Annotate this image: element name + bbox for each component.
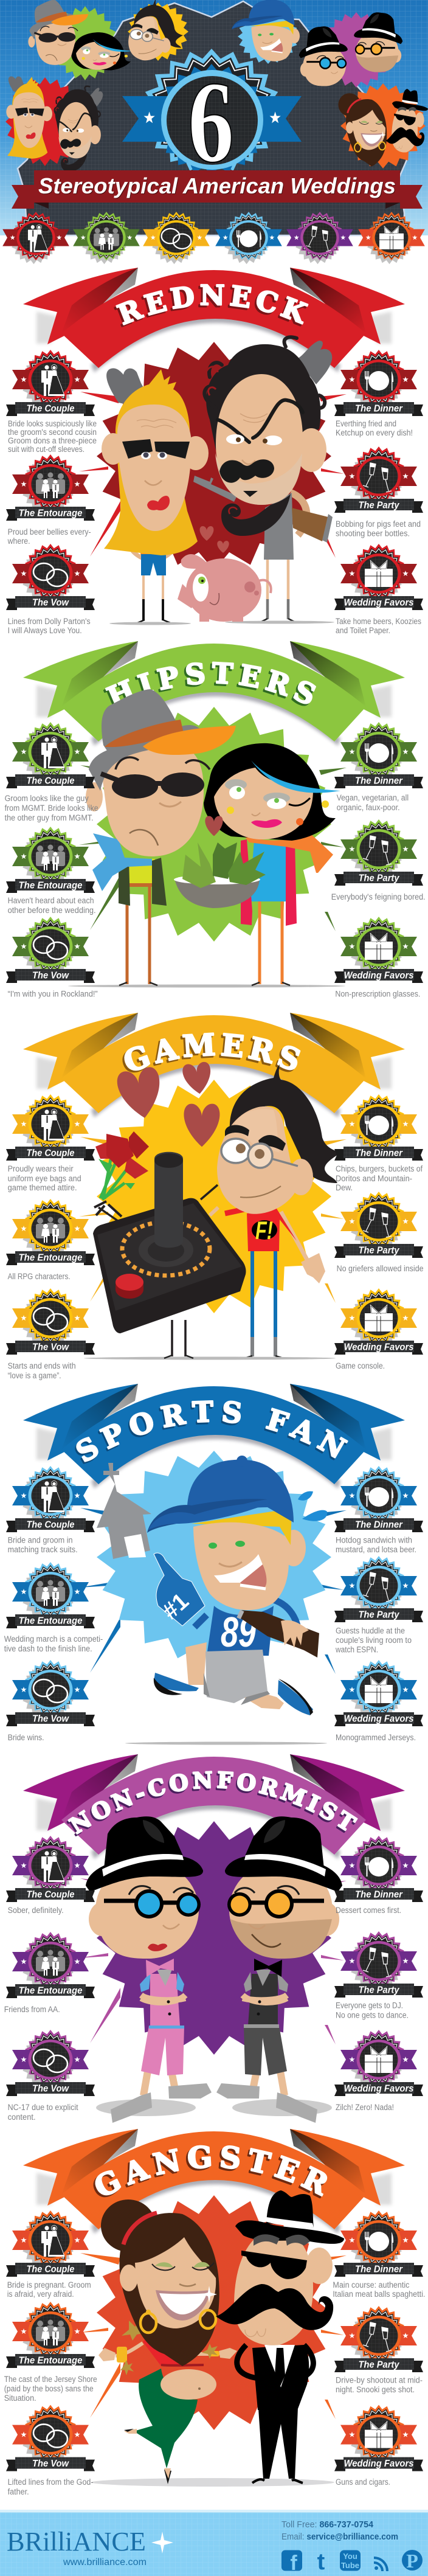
icon: sweat drops — [298, 1491, 327, 1521]
logo wordmark: BRilliANCE — [7, 2527, 146, 2557]
icon: pinterest: P — [406, 2550, 418, 2572]
badge: wedding favors: Wedding Favors — [344, 2459, 414, 2469]
text: the party: watch ESPN. — [335, 1645, 378, 1654]
toll free: Toll Free: 866-737-0754 — [281, 2520, 373, 2530]
logo sparkle — [151, 2532, 173, 2553]
badge: the couple: The Couple — [27, 1519, 75, 1530]
badge: the party: The Party — [359, 2360, 400, 2370]
text: the couple: matching track suits. — [8, 1545, 78, 1554]
text: the couple: Groom dons a three-piece — [8, 436, 97, 445]
website: www.brilliance.com — [63, 2557, 147, 2567]
text: the vow — [8, 617, 91, 635]
text: the couple: the groom's second cousin — [8, 428, 97, 437]
ribbon: sports fan — [23, 1384, 405, 1489]
text: wedding favors: and Toilet Paper. — [336, 626, 390, 635]
badge: the party — [334, 2306, 423, 2372]
text: the couple: Bride is pregnant. Groom — [7, 2280, 91, 2290]
text: wedding favors: Monogrammed Jerseys. — [336, 1733, 416, 1742]
text: the couple: from MGMT. Bride looks like — [5, 804, 98, 813]
text: the dinner: Vegan, vegetarian, all — [337, 793, 409, 802]
text: the entourage — [4, 1634, 103, 1653]
text: the entourage: All RPG characters. — [8, 1272, 71, 1281]
character: hipster groom — [68, 689, 345, 988]
text: the dinner: Ketchup on every dish! — [336, 428, 413, 437]
badge: the dinner: The Dinner — [355, 2264, 403, 2275]
ribbon: hipsters — [23, 641, 405, 747]
badge: the entourage — [6, 1932, 95, 1998]
badge: the couple: The Couple — [27, 1889, 75, 1900]
text: the entourage: Friends from AA. — [4, 2005, 60, 2014]
text: the dinner: Dessert comes first. — [336, 1906, 401, 1915]
badge: the dinner: The Dinner — [355, 404, 403, 414]
badge: the couple: The Couple — [27, 1148, 75, 1158]
text: the entourage — [4, 2375, 97, 2403]
character: redneck groom — [193, 337, 334, 624]
illustration: bowl of greens — [174, 842, 266, 908]
text: the entourage — [7, 527, 91, 546]
text: the couple: the other guy from MGMT. — [5, 813, 94, 822]
panel: non-conformist — [4, 1754, 423, 2123]
text: the vow: father. — [8, 2487, 29, 2496]
text: the vow: I will Always Love You. — [8, 626, 82, 635]
ribbon: redneck — [23, 268, 405, 373]
badge: the entourage: The Entourage — [18, 881, 83, 890]
icon: heart — [205, 816, 223, 836]
text: the dinner — [336, 419, 413, 437]
badge: the vow — [6, 544, 95, 610]
text: the dinner: organic, faux-poor. — [337, 803, 400, 812]
badge: the dinner — [334, 1836, 423, 1902]
badge: the entourage — [6, 827, 95, 893]
character: sports fan: 89 — [221, 1608, 256, 1656]
text: the party — [336, 2376, 423, 2394]
badge: the vow: The Vow — [32, 971, 69, 981]
text: the dinner — [336, 1536, 416, 1554]
badge: the dinner — [334, 350, 423, 416]
badge: the couple: The Couple — [27, 2264, 75, 2275]
panel: gangster — [4, 2129, 425, 2496]
text: the dinner — [337, 793, 409, 812]
character: sports fan: #1 — [157, 1588, 194, 1625]
text: the dinner: Doritos and Mountain- — [336, 1174, 412, 1183]
text: the entourage: Haven't heard about each — [8, 896, 94, 905]
character: non-conformist groom — [216, 1816, 342, 2123]
character: redneck bride — [102, 368, 209, 625]
big numeral: 6 — [188, 57, 234, 187]
text: wedding favors: Non-prescription glasses. — [335, 989, 420, 999]
badge: the dinner: The Dinner — [355, 1519, 403, 1530]
text: the party: night. Snooki gets shot. — [336, 2385, 415, 2394]
icon: hearts — [116, 1061, 220, 1147]
badge: wedding favors: Wedding Favors — [344, 971, 414, 981]
badge: the party — [334, 1556, 423, 1622]
text: the couple — [8, 1164, 81, 1192]
badge: the vow: The Vow — [32, 2459, 69, 2469]
text: the party: Drive-by shootout at mid- — [336, 2376, 423, 2384]
header face: gangsters — [338, 83, 428, 168]
badge: the entourage — [6, 454, 95, 521]
header face: non-conformists — [299, 12, 402, 88]
text: the dinner: Everthing fried and — [336, 419, 396, 428]
text: the vow: content. — [8, 2113, 36, 2122]
footer panel — [0, 2510, 428, 2576]
text: the entourage: (paid by the boss) sans the — [4, 2384, 94, 2394]
badge: the dinner — [334, 2210, 423, 2277]
text: the couple: is afraid, very afraid. — [7, 2290, 74, 2299]
panel: sports fan — [4, 1384, 423, 1745]
badge: wedding favors — [334, 917, 423, 983]
text: the couple: suit with cut-off sleeves. — [8, 445, 85, 454]
text: the dinner: Hotdog sandwich with — [336, 1536, 412, 1545]
text: the party: No griefers allowed inside — [337, 1264, 424, 1273]
text: the couple — [7, 2280, 91, 2299]
icon: pinterest — [402, 2550, 423, 2572]
character: gangster groom — [216, 2190, 344, 2483]
text: the dinner: mustard, and lotsa beer. — [336, 1545, 416, 1554]
panel: hipsters — [5, 641, 426, 999]
text: the vow — [8, 2477, 94, 2496]
badge: the vow — [6, 2405, 95, 2471]
text: the entourage: The cast of the Jersey Shore — [4, 2375, 97, 2384]
text: the vow: Lines from Dolly Parton's — [8, 617, 91, 626]
text: the dinner — [336, 1164, 423, 1192]
illustration: pig — [178, 554, 271, 622]
badge: the couple — [6, 1466, 95, 1532]
badge: wedding favors: Wedding Favors — [344, 1342, 414, 1353]
email: Email: service@brilliance.com — [281, 2532, 398, 2542]
text: the couple: Sober, definitely. — [8, 1906, 64, 1915]
badge: the party — [334, 446, 423, 513]
badge: the vow: The Vow — [32, 1342, 69, 1353]
badge: the vow: The Vow — [32, 2084, 69, 2094]
icon: youtube — [340, 2550, 361, 2571]
text: the couple: Bride looks suspiciously like — [8, 419, 97, 428]
ribbon: hipsters: HIPSTERS — [103, 662, 316, 706]
ribbon: gamers: GAMERS — [122, 1032, 300, 1073]
text: the party: shooting beer bottles. — [336, 529, 410, 538]
badge: the entourage: The Entourage — [18, 1253, 83, 1263]
ribbon: gamers — [23, 1013, 405, 1118]
badge: the party — [334, 1192, 423, 1258]
text: wedding favors: Zilch! Zero! Nada! — [336, 2103, 394, 2112]
badge: the entourage — [6, 2302, 95, 2368]
text: the couple: Groom looks like the guy — [5, 794, 89, 803]
badge: the vow: The Vow — [32, 597, 69, 608]
badge: wedding favors: Wedding Favors — [344, 2084, 414, 2094]
central badge with number 6 — [122, 49, 302, 187]
icon: facebook: f — [290, 2552, 297, 2575]
icon: facebook — [281, 2550, 302, 2575]
badge: the party: The Party — [359, 500, 400, 511]
badge: the vow — [6, 917, 95, 983]
character: non-conformist bride — [86, 1816, 212, 2123]
text: the entourage: Proud beer bellies every- — [8, 527, 91, 536]
text: the dinner: Main course: authentic — [333, 2280, 410, 2290]
badge: the vow — [6, 1660, 95, 1726]
badge: the vow — [6, 1288, 95, 1355]
badge: the dinner: The Dinner — [355, 776, 403, 786]
badge: the couple — [6, 350, 95, 416]
badge: wedding favors — [334, 2030, 423, 2096]
ribbon: sports fan: SPORTS FAN — [75, 1400, 348, 1464]
text: the couple — [8, 1536, 78, 1554]
text: the vow: NC-17 due to explicit — [8, 2103, 78, 2112]
badge: the couple: The Couple — [27, 776, 75, 786]
text: the couple: game themed attire. — [8, 1183, 77, 1192]
text: the dinner — [333, 2280, 425, 2299]
text: wedding favors — [336, 617, 421, 635]
character: gangster bride — [91, 2199, 334, 2487]
text: the couple — [5, 794, 98, 822]
text: the entourage: Wedding march is a competi- — [4, 1634, 103, 1644]
text: the party — [336, 2001, 409, 2019]
badge: wedding favors — [334, 544, 423, 610]
text: the couple — [8, 419, 97, 454]
text: the vow — [8, 2103, 78, 2122]
icon: rss — [374, 2558, 387, 2571]
title text: Stereotypical American Weddings — [38, 173, 396, 198]
text: the entourage — [8, 896, 96, 915]
badge: the entourage — [6, 1562, 95, 1628]
badge: the party — [334, 819, 423, 886]
title banner — [12, 170, 423, 209]
badge: the party: The Party — [359, 1609, 400, 1620]
badge: the entourage: The Entourage — [18, 1985, 83, 1996]
badge: the dinner — [334, 1094, 423, 1161]
character: sports fan — [125, 1456, 327, 1745]
badge: the party: The Party — [359, 873, 400, 883]
badge: the dinner: The Dinner — [355, 1889, 403, 1900]
text: the party: Guests huddle at the — [336, 1626, 405, 1636]
text: the party — [336, 519, 421, 538]
text: the party: Bobbing for pigs feet and — [336, 519, 421, 529]
badge: wedding favors — [334, 1660, 423, 1726]
text: the couple: Bride and groom in — [8, 1536, 73, 1545]
icon: youtube: Tube — [341, 2561, 359, 2570]
ribbon: gangster: GANGSTER — [94, 2145, 327, 2198]
text: the party — [335, 1626, 412, 1654]
ribbon: non-conformist — [23, 1754, 405, 1860]
illustration: bouquet — [94, 1131, 149, 1217]
ribbon: non-conformist: NON-CONFORMIST — [67, 1771, 357, 1836]
badge: the dinner — [334, 722, 423, 788]
header face: rednecks — [5, 77, 103, 172]
text: the vow: “I'm with you in Rockland!” — [8, 989, 98, 999]
badge: the couple — [6, 1836, 95, 1902]
badge: wedding favors — [334, 2405, 423, 2471]
badge: the party: The Party — [359, 1985, 400, 1995]
character: gamer groom: F! — [255, 1216, 273, 1245]
text: the party: No one gets to dance. — [336, 2011, 409, 2019]
illustration: joystick — [93, 1152, 246, 1358]
badge: wedding favors — [334, 1288, 423, 1355]
category badge row — [2, 212, 425, 264]
badge: the vow — [6, 2030, 95, 2096]
badge: the entourage: The Entourage — [18, 2355, 83, 2366]
badge: the entourage — [6, 1199, 95, 1265]
text: the entourage: tive dash to the finish line. — [4, 1644, 92, 1653]
text: the vow: Bride wins. — [8, 1733, 44, 1742]
icon: hearts — [200, 526, 229, 553]
text: wedding favors: Game console. — [336, 1361, 385, 1370]
header dark shield panel — [18, 1, 407, 235]
text: the vow: Starts and ends with — [8, 1361, 76, 1370]
text: the vow: Lifted lines from the God- — [8, 2477, 94, 2487]
badge: the couple: The Couple — [27, 404, 75, 414]
text: the couple: Proudly wears their — [8, 1164, 74, 1173]
text: the party: Everyone gets to DJ. — [336, 2001, 403, 2010]
header background — [0, 0, 428, 235]
header face: hipsters couple — [28, 0, 133, 80]
badge: the party — [334, 1931, 423, 1998]
header face: gamer — [128, 0, 188, 61]
badge: wedding favors: Wedding Favors — [344, 597, 414, 608]
header face: sports fan — [232, 0, 300, 64]
ribbon: gangster — [23, 2129, 405, 2235]
text: the party: couple's living room to — [336, 1636, 412, 1645]
badge: the dinner — [334, 1466, 423, 1532]
character: hipster bride — [204, 743, 340, 985]
icon: twitter: t — [317, 2549, 325, 2575]
text: wedding favors: Guns and cigars. — [336, 2477, 390, 2487]
text: the entourage: Situation. — [4, 2394, 36, 2403]
panel: gamers — [6, 1013, 424, 1380]
text: the vow: “love is a game”. — [8, 1371, 61, 1380]
ribbon: redneck: REDNECK — [114, 283, 309, 327]
character: gamer groom — [84, 1064, 341, 1360]
badge: the vow: The Vow — [32, 1714, 69, 1724]
text: the entourage: where. — [7, 536, 30, 546]
badge: the party: The Party — [359, 1246, 400, 1255]
badge: the entourage: The Entourage — [18, 509, 83, 518]
text: the couple: uniform eye bags and — [8, 1174, 81, 1183]
text: the vow — [8, 1361, 76, 1380]
badge: the dinner: The Dinner — [355, 1148, 403, 1158]
badge: the couple — [6, 722, 95, 788]
text: the dinner: Dew. — [336, 1183, 353, 1192]
badge: wedding favors: Wedding Favors — [344, 1714, 414, 1724]
badge: the entourage: The Entourage — [18, 1616, 83, 1626]
text: the entourage: other before the wedding. — [8, 906, 96, 915]
icon: youtube: You — [343, 2552, 357, 2561]
badge: the couple — [6, 1094, 95, 1161]
illustration: church — [97, 1463, 151, 1559]
badge: the couple — [6, 2210, 95, 2277]
panel: redneck — [6, 268, 423, 635]
